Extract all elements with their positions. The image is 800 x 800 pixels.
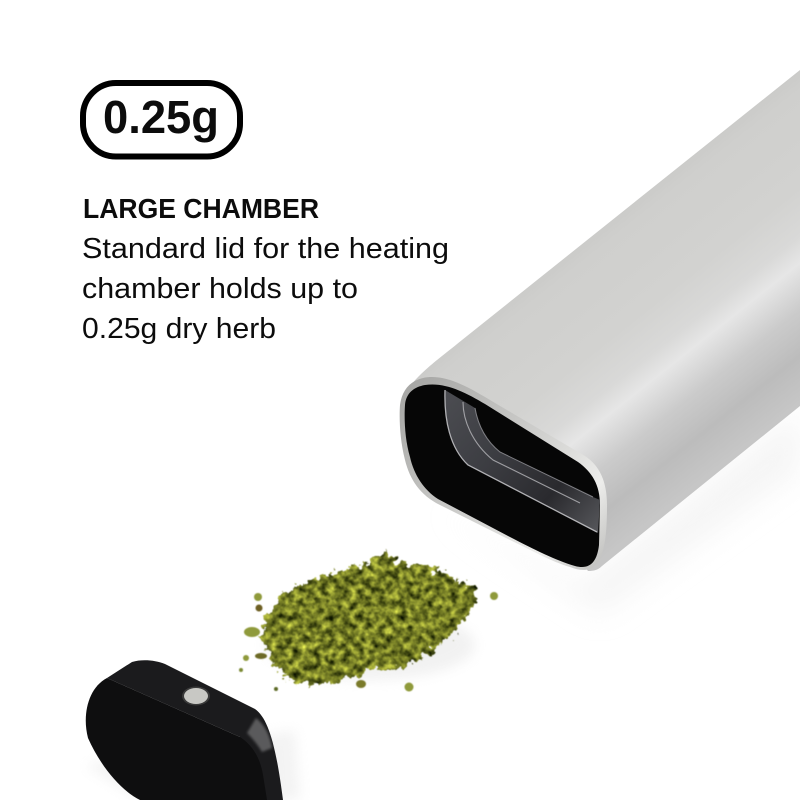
lid button xyxy=(182,686,210,706)
stray herb flakes xyxy=(239,592,498,692)
body text: Standard lid for the heating xyxy=(82,233,449,265)
chamber opening xyxy=(405,384,600,567)
corner highlight xyxy=(247,718,272,752)
lid front face xyxy=(86,678,267,800)
lid top side xyxy=(107,660,283,800)
badge: 0.25g: 0.25g xyxy=(103,91,219,143)
body text: 0.25g dry herb xyxy=(82,313,276,345)
lid: black chamber lid with button xyxy=(85,660,300,800)
body shell xyxy=(410,70,800,571)
shadow: under device xyxy=(440,410,800,615)
lid shadow xyxy=(85,730,300,800)
body text: chamber holds up to xyxy=(82,273,358,305)
clear inner tray xyxy=(445,390,600,533)
body text xyxy=(82,233,449,345)
device: aluminium vaporizer body xyxy=(400,70,800,571)
heading: LARGE CHAMBER xyxy=(83,193,319,224)
rim xyxy=(400,377,607,570)
badge: 0.25g xyxy=(83,83,240,156)
text block: large chamber description xyxy=(82,193,449,345)
shadow under herb xyxy=(265,610,475,680)
herb pile xyxy=(239,550,498,692)
ground dry herb xyxy=(261,550,475,684)
